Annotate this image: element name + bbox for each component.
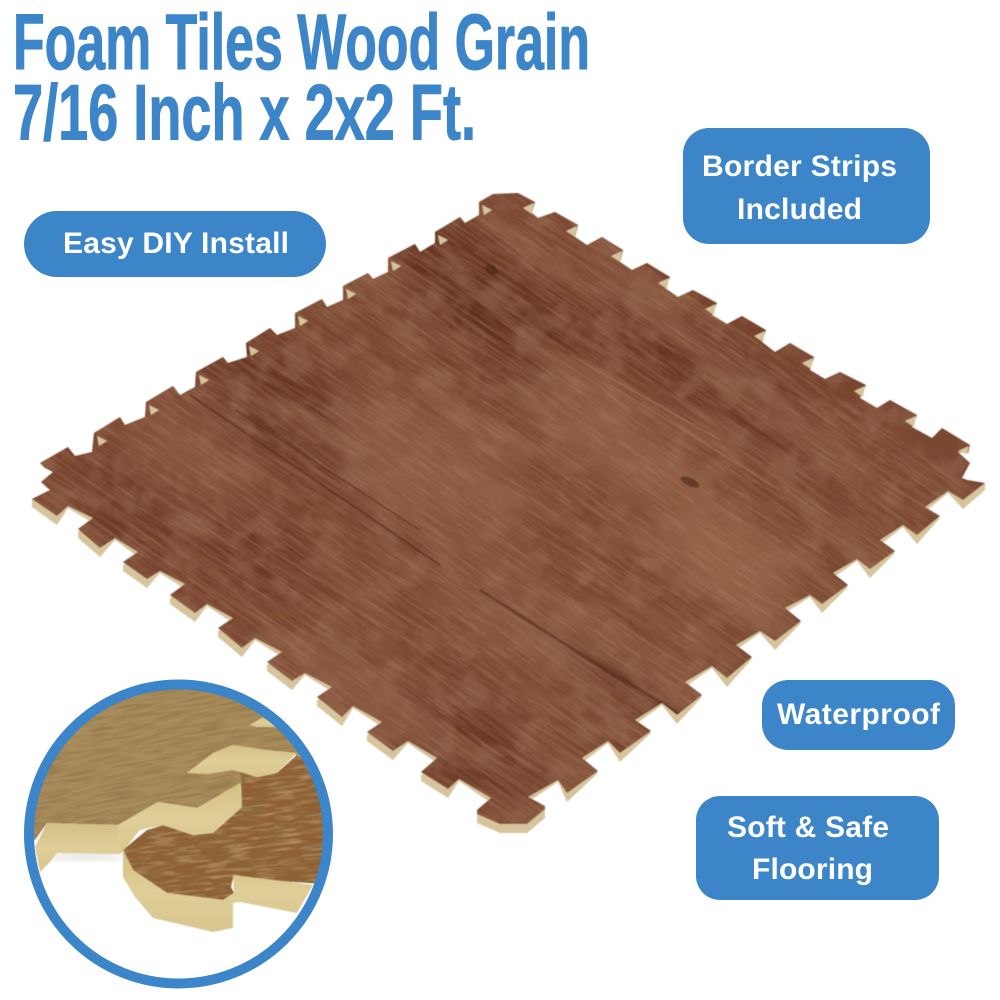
inset: close-up of foam edge <box>24 680 333 988</box>
title <box>13 0 590 156</box>
tile wood surface <box>32 192 985 824</box>
pill: border strips included: Border Strips <box>702 150 897 183</box>
inset light wood tile <box>34 690 300 841</box>
inset cream foam edges <box>35 717 313 932</box>
pill: soft and safe flooring: Flooring <box>752 853 873 886</box>
inset dark wood tile <box>122 754 323 901</box>
tile tooth foam edges <box>97 203 969 454</box>
foam tile product image <box>32 192 986 834</box>
tile cream foam body <box>32 193 985 833</box>
pill: easy DIY install <box>24 211 326 277</box>
inset shadow <box>45 853 125 859</box>
pill: soft and safe flooring <box>696 796 939 900</box>
pill: waterproof: Waterproof <box>777 698 941 731</box>
pill: border strips included <box>683 128 930 244</box>
pill: border strips included: Included <box>737 193 862 226</box>
inset blue ring <box>29 684 328 984</box>
pill: waterproof <box>762 680 955 750</box>
title line 2: 7/16 Inch x 2x2 Ft. <box>13 68 476 156</box>
pill: easy DIY install: Easy DIY Install <box>63 227 289 260</box>
pill: soft and safe flooring: Soft & Safe <box>727 811 889 844</box>
